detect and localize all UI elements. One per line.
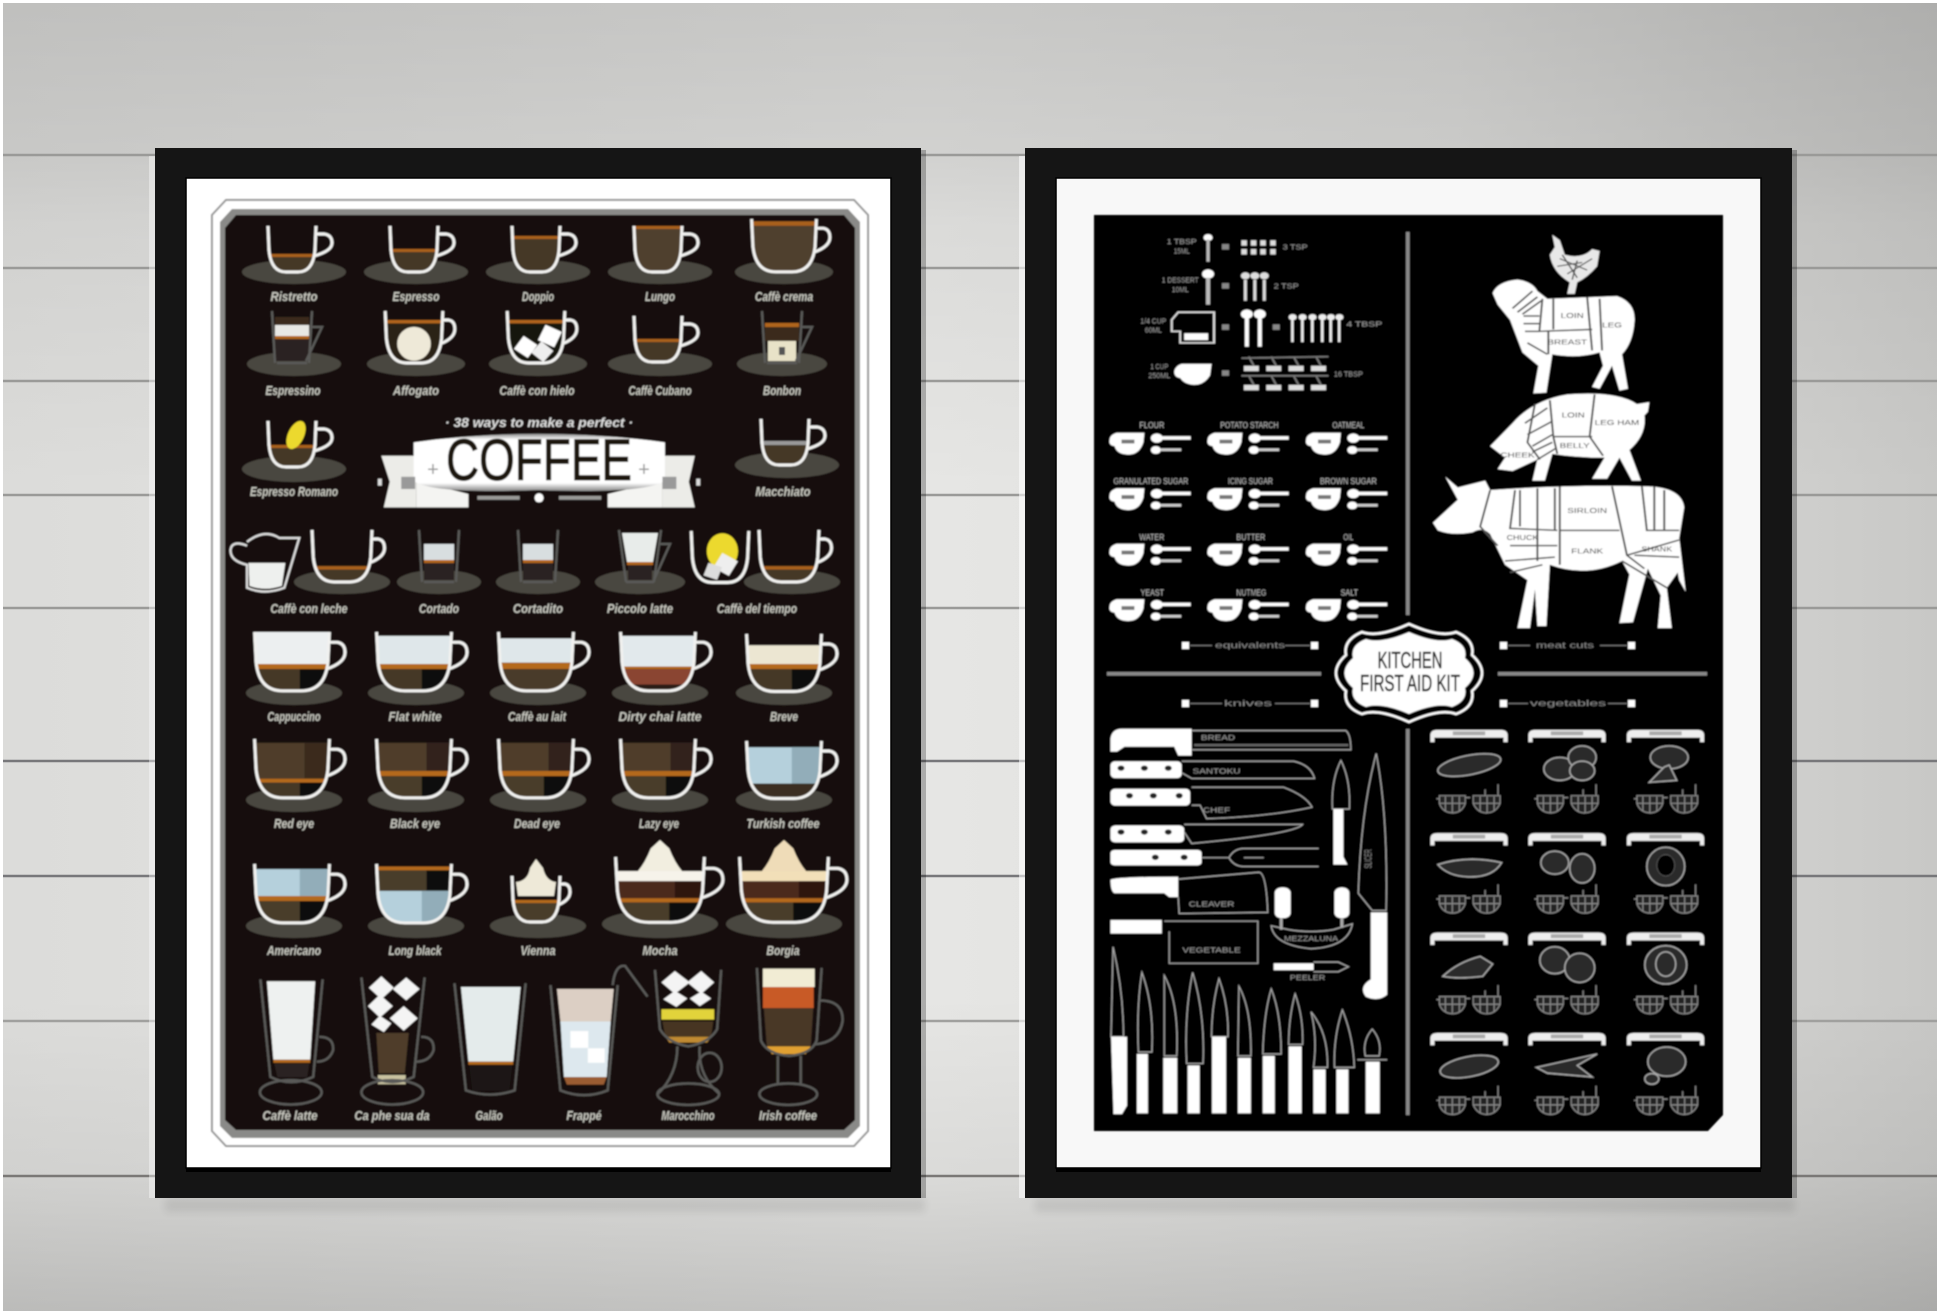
- row: tablespoon: 3 TSP: [1283, 243, 1308, 251]
- drink: Lazy eye: [612, 739, 711, 831]
- conversion grid: cups and spoons: SALT: [1341, 589, 1358, 598]
- drink: Bonbon: [737, 311, 827, 398]
- drink: Long black: [368, 864, 467, 958]
- drink: Dirty chai latte: [612, 632, 711, 724]
- drink: Turkish coffee: Turkish coffee: [746, 816, 820, 831]
- section labels: vegetables: [1530, 699, 1606, 708]
- knife: large slicer upright: SLICER: [1363, 849, 1374, 868]
- conversion grid: cups and spoons: WATER: [1139, 533, 1164, 543]
- drink: Breve: Breve: [770, 709, 798, 724]
- vegetable: row four: [1437, 1047, 1686, 1084]
- row: dessert spoon: 1 DESSERT: [1162, 275, 1199, 284]
- conversion grid: cups and spoons: BROWN SUGAR: [1320, 477, 1377, 487]
- dark coffee panel: [225, 215, 855, 1130]
- animals: butcher cuts: [1433, 235, 1686, 628]
- conversion grid: cups and spoons: BUTTER: [1236, 533, 1265, 543]
- conversion grid: cups and spoons: YEAST: [1141, 589, 1164, 598]
- drink: Caffe del tiempo: [691, 530, 840, 616]
- knife: chinese cleaver: VEGETABLE: [1182, 946, 1241, 954]
- vegetable: row one: [1435, 746, 1688, 782]
- row: measuring jug: 60ML: [1145, 326, 1162, 334]
- drink: Caffe con hielo: [489, 311, 587, 398]
- drink: Ristretto: [242, 226, 346, 304]
- drink: Dirty chai latte: Dirty chai latte: [618, 709, 702, 724]
- drink: Irish coffee: Irish coffee: [759, 1108, 817, 1123]
- title banner: COFFEE: · 38 ways to make a perfect ·: [445, 415, 633, 430]
- icon: pig: LEG HAM: [1595, 418, 1639, 427]
- drink: Vienna: [490, 859, 586, 958]
- icon: pig: BELLY: [1560, 441, 1590, 450]
- mat: right: [1056, 178, 1761, 1168]
- title banner: COFFEE: COFFEE: [446, 428, 632, 493]
- knife: boning upright: [1332, 760, 1350, 865]
- icon: cow: CHUCK: [1507, 534, 1539, 542]
- poster border: [212, 200, 868, 1146]
- drink: Espresso Romano: [242, 418, 346, 499]
- icons: portion pots: [1436, 784, 1698, 1114]
- knife: bread: BREAD: [1201, 733, 1235, 742]
- drink: Frappe: [550, 966, 648, 1123]
- icon: lamb: LOIN: [1561, 311, 1584, 320]
- row: dessert spoon: 2 TSP: [1274, 282, 1299, 290]
- drink: Frappe: Frappé: [566, 1108, 602, 1123]
- knife: santoku: [1111, 761, 1315, 778]
- vegetable: row two: [1438, 847, 1685, 886]
- title banner: COFFEE: +: [427, 459, 439, 481]
- drink: Cappuccino: [246, 632, 345, 724]
- knife: chef: CHEF: [1203, 806, 1231, 814]
- drink: Black eye: [368, 739, 467, 831]
- row: measuring jug: [1140, 310, 1382, 347]
- icon: cow: [1433, 477, 1686, 628]
- drink: Caffe latte: [260, 979, 333, 1123]
- poster artwork: kitchen: [1094, 215, 1723, 1131]
- row: cup: [1148, 357, 1363, 390]
- conversion grid: cups and spoons: FLOUR: [1139, 421, 1164, 431]
- drink: Long black: Long black: [388, 943, 442, 958]
- drink: Dead eye: [490, 739, 589, 831]
- section labels: [1182, 641, 1635, 708]
- icon: pig: [1490, 394, 1649, 481]
- vegetable: row three: [1443, 946, 1687, 984]
- drink: Caffe crema: [735, 219, 833, 304]
- conversion grid: cups and spoons: [1109, 421, 1387, 621]
- knives: [1111, 729, 1387, 1114]
- knife: large slicer upright: [1358, 754, 1387, 999]
- row: tablespoon: [1167, 234, 1308, 262]
- icon: cow: SHANK: [1641, 545, 1673, 553]
- row: cup: 250ML: [1148, 371, 1170, 380]
- knife: mezzaluna: [1271, 888, 1352, 949]
- drink: Caffe au lait: Caffè au lait: [508, 709, 567, 724]
- icon: cow: FLANK: [1571, 546, 1603, 555]
- drink: Ca phe sua da: [354, 976, 434, 1123]
- icon: chicken: [1550, 235, 1600, 294]
- drink: Caffe con hielo: Caffè con hielo: [500, 383, 575, 398]
- drink: Doppio: Doppio: [522, 289, 554, 304]
- drink: Caffe au lait: [490, 632, 589, 724]
- badge: Kitchen First Aid Kit: KITCHEN: [1378, 647, 1442, 673]
- framed poster: kitchen first aid kit: [1025, 148, 1792, 1198]
- chart: measure equivalents: [1109, 234, 1387, 621]
- row: tablespoon: 1 TBSP: [1167, 237, 1197, 246]
- drink: Red eye: Red eye: [274, 816, 314, 831]
- section labels: equivalents: [1215, 641, 1285, 650]
- drink: Caffe Cubano: Caffè Cubano: [628, 383, 692, 398]
- icon: lamb: [1493, 280, 1635, 393]
- drink: Flat white: [368, 632, 467, 724]
- knife: cleaver: CLEAVER: [1189, 900, 1234, 908]
- drink: Espresso: Espresso: [392, 289, 440, 304]
- drink: Marocchino: [655, 970, 722, 1123]
- icon: lamb: LEG: [1602, 321, 1622, 329]
- drink: Espressino: Espressino: [266, 383, 321, 398]
- drink: Black eye: Black eye: [390, 816, 440, 831]
- knife: carving fork: [1111, 848, 1318, 866]
- knife row: small knives: [1111, 947, 1387, 1114]
- section labels: meat cuts: [1536, 641, 1594, 650]
- drink: Marocchino: Marocchino: [662, 1108, 715, 1123]
- row: measuring jug: 4 TBSP: [1346, 320, 1382, 328]
- row: dessert spoon: [1162, 269, 1299, 305]
- drink: Mocha: Mocha: [642, 943, 678, 958]
- frame: left: [155, 148, 921, 1198]
- drink: Galao: [454, 983, 526, 1123]
- drink: Turkish coffee: [736, 741, 837, 831]
- badge: Kitchen First Aid Kit: FIRST AID KIT: [1360, 670, 1460, 696]
- section labels: knives: [1224, 699, 1272, 708]
- row: cup: 16 TBSP: [1334, 370, 1363, 378]
- drink: Piccolo latte: Piccolo latte: [607, 601, 673, 616]
- drink: Piccolo latte: [595, 530, 685, 616]
- drink: Caffe latte: Caffè latte: [262, 1108, 318, 1123]
- knife: peeler: PEELER: [1290, 974, 1325, 982]
- drink: Ristretto: Ristretto: [270, 289, 318, 304]
- drink: Ca phe sua da: Ca phe sua da: [354, 1108, 430, 1123]
- drink: Espresso: [364, 226, 468, 304]
- title banner: COFFEE: +: [638, 459, 650, 481]
- conversion grid: cups and spoons: NUTMEG: [1236, 589, 1266, 598]
- drink: Lazy eye: Lazy eye: [639, 816, 679, 831]
- row: measuring jug: 1/4 CUP: [1140, 317, 1166, 325]
- knife: mezzaluna: MEZZALUNA: [1284, 935, 1339, 943]
- drink: Galao: Galão: [476, 1108, 503, 1123]
- drink: Vienna: Vienna: [520, 943, 556, 958]
- knife: utility: [1111, 824, 1303, 844]
- drink: Borgia: [726, 840, 847, 958]
- drink: Cortado: [397, 530, 481, 616]
- drink: Caffe crema: Caffè crema: [755, 289, 813, 304]
- drink: Caffe con leche: Caffè con leche: [270, 601, 348, 616]
- knife: chinese cleaver: [1111, 920, 1258, 963]
- drink: Americano: Americano: [266, 943, 321, 958]
- black kitchen panel: [1094, 215, 1723, 1131]
- drink: Red eye: [246, 739, 345, 831]
- knife: cleaver: [1111, 872, 1268, 914]
- frame: right: [1025, 148, 1792, 1198]
- drink: Affogato: Affogato: [392, 383, 439, 398]
- framed poster: coffee: [155, 148, 921, 1198]
- drink: Lungo: [608, 226, 712, 304]
- icon: cow: SIRLOIN: [1567, 506, 1607, 515]
- drink: Cortadito: [496, 530, 580, 616]
- drink: Macchiato: Macchiato: [756, 484, 811, 499]
- drink: Cappuccino: Cappuccino: [268, 709, 321, 724]
- conversion grid: cups and spoons: ICING SUGAR: [1228, 477, 1273, 487]
- dividers: [1107, 232, 1707, 1115]
- conversion grid: cups and spoons: OATMEAL: [1332, 421, 1365, 431]
- vegetables grid: [1430, 730, 1704, 1114]
- drink: Bonbon: Bonbon: [763, 383, 801, 398]
- drink: Breve: [736, 634, 837, 724]
- poster artwork: coffee: [212, 200, 868, 1146]
- drink: Cortadito: Cortadito: [513, 601, 563, 616]
- conversion grid: cups and spoons: OIL: [1343, 533, 1354, 543]
- drink: Caffe Cubano: [608, 316, 712, 398]
- drink: Americano: [246, 864, 345, 958]
- conversion grid: cups and spoons: GRANULATED SUGAR: [1114, 477, 1188, 487]
- drink: Espresso Romano: Espresso Romano: [250, 484, 338, 499]
- row: cup: 1 CUP: [1150, 362, 1168, 371]
- drink: Cortado: Cortado: [419, 601, 459, 616]
- drink: Doppio: [486, 226, 590, 304]
- row: tablespoon: 15ML: [1174, 246, 1190, 255]
- knife: chef: [1111, 787, 1312, 819]
- row: dessert spoon: 10ML: [1172, 285, 1189, 294]
- drink: Lungo: Lungo: [645, 289, 675, 304]
- conversion grid: cups and spoons: POTATO STARCH: [1220, 421, 1278, 431]
- drink: Macchiato: [735, 419, 839, 499]
- drink: Espressino: [247, 311, 341, 398]
- drink: Flat white: Flat white: [388, 709, 442, 724]
- drink: Mocha: [602, 840, 723, 958]
- glass drinks row: [260, 966, 843, 1123]
- drink: Affogato: [367, 311, 465, 398]
- drink: Borgia: Borgia: [766, 943, 800, 958]
- drink: Dead eye: Dead eye: [514, 816, 560, 831]
- badge: Kitchen First Aid Kit: [1336, 624, 1482, 722]
- icon: lamb: BREAST: [1547, 338, 1588, 346]
- mat: left: [186, 178, 891, 1168]
- title banner: COFFEE: [378, 415, 700, 507]
- banners: [1430, 730, 1704, 1045]
- icon: pig: CHEEK: [1500, 451, 1535, 459]
- drink: Caffe del tiempo: Caffè del tiempo: [717, 601, 797, 616]
- drink: Caffe con leche: [231, 530, 390, 616]
- knife: bread: [1111, 729, 1351, 755]
- knife: santoku: SANTOKU: [1193, 767, 1240, 775]
- knife: peeler: [1274, 962, 1348, 982]
- icon: pig: LOIN: [1562, 411, 1585, 419]
- drink: Irish coffee: [757, 968, 843, 1123]
